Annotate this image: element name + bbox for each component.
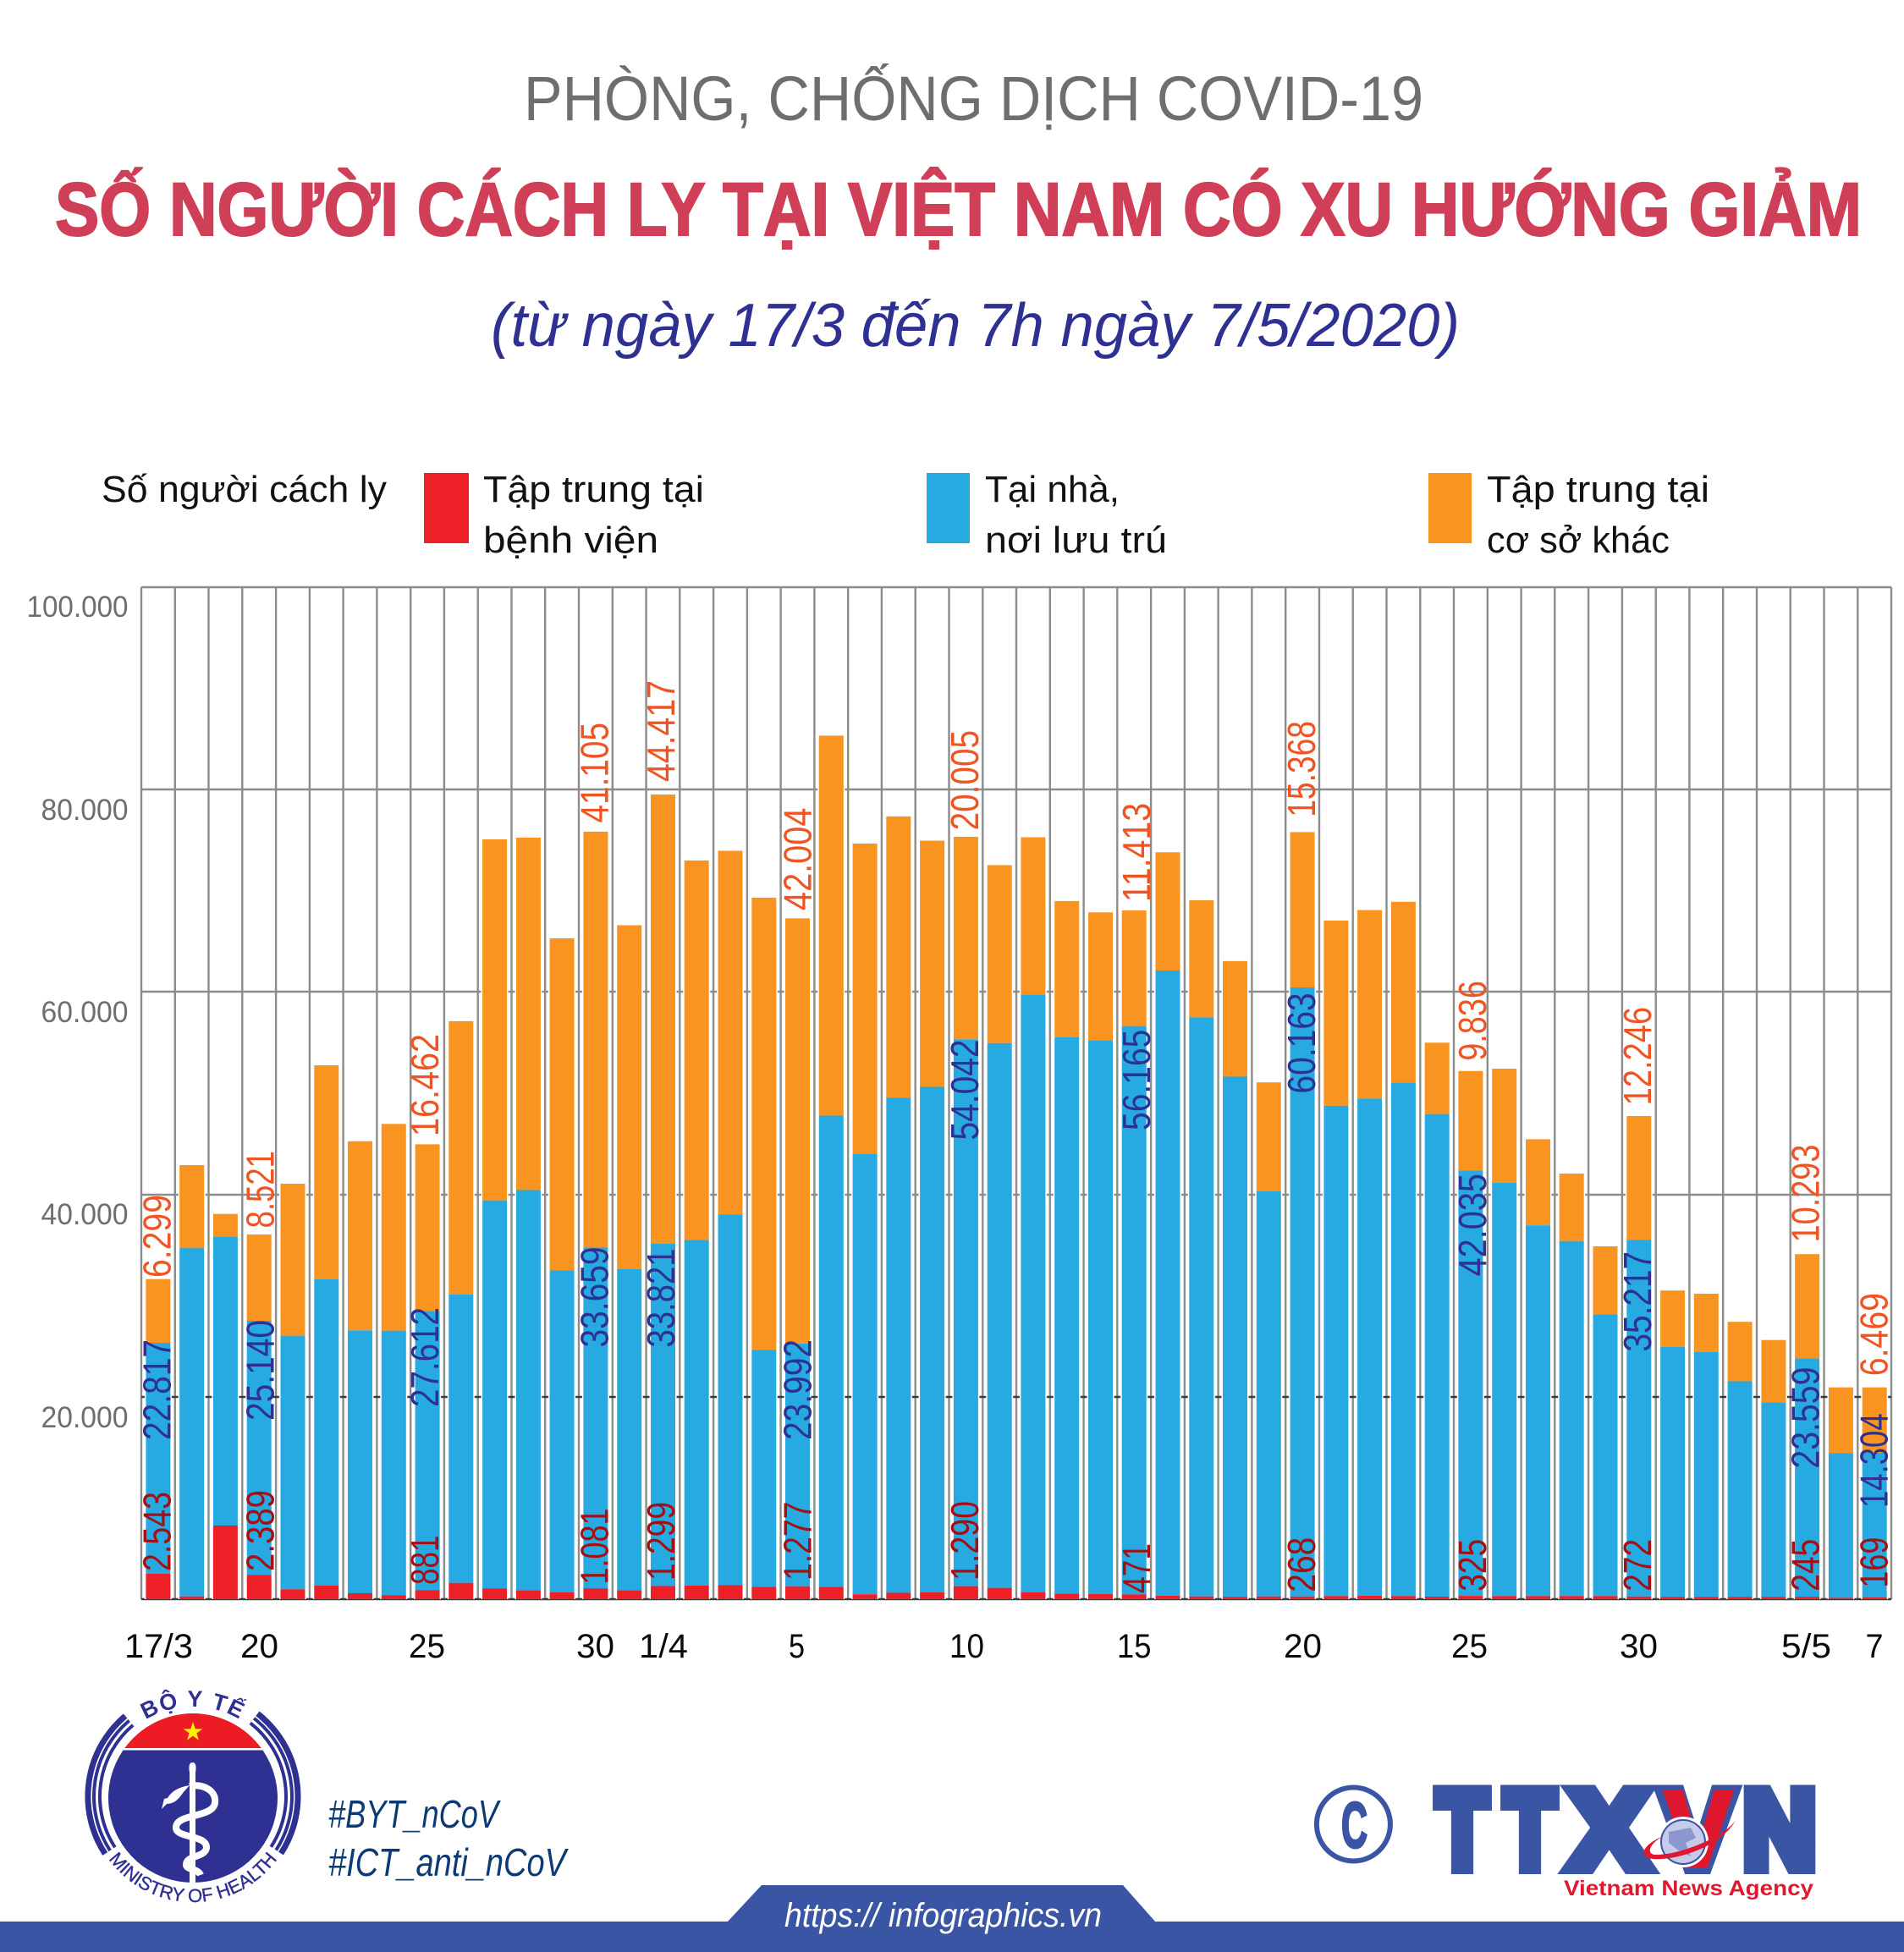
data labels 10/4: 54.042	[943, 1039, 987, 1141]
data labels 30/4	[1615, 1007, 1659, 1592]
data labels 7/5: 169	[1852, 1537, 1896, 1588]
data labels 30/4: 35.217	[1615, 1251, 1659, 1352]
bar 21/4	[1323, 920, 1350, 1599]
bar 23/3	[347, 1141, 374, 1599]
bar 16/4	[1154, 851, 1181, 1599]
bar 18/3	[179, 1164, 206, 1599]
bar 11/4	[986, 865, 1013, 1599]
data labels 30/3: 1.081	[572, 1508, 616, 1584]
hashtags: #BYT_nCoV	[328, 1792, 501, 1836]
bar 6/5	[1827, 1387, 1854, 1599]
x axis date labels: 30	[576, 1628, 614, 1665]
x axis date labels: 1/4	[639, 1628, 688, 1665]
bar 8/4	[885, 816, 912, 1599]
y axis labels: 20.000	[41, 1401, 129, 1434]
y axis labels: 80.000	[41, 794, 129, 827]
bar 28/3	[515, 837, 542, 1599]
x axis date labels: 17/3	[124, 1628, 193, 1665]
data labels 25/4: 9.836	[1450, 981, 1494, 1061]
y axis labels: 60.000	[41, 996, 129, 1029]
x axis date labels: 20	[240, 1628, 278, 1665]
data labels 5/4	[775, 808, 819, 1581]
data labels 30/4: 272	[1615, 1539, 1659, 1592]
x axis date labels: 10	[949, 1628, 984, 1665]
data labels 20/3: 25.140	[239, 1320, 283, 1421]
data labels 1/4: 44.417	[639, 680, 683, 782]
footer tab with website	[727, 1885, 1156, 1934]
legend item: other facilities: cơ sở khác	[1487, 520, 1670, 561]
bar 19/3	[212, 1213, 239, 1599]
bar 27/3	[482, 839, 509, 1599]
bar 10/4	[952, 836, 979, 1599]
x axis date labels: 5	[789, 1628, 805, 1665]
icon: copyright mark: C	[1341, 1790, 1367, 1861]
data labels 25/4	[1450, 981, 1494, 1592]
data labels 20/4: 268	[1279, 1537, 1323, 1592]
data labels 30/3: 41.105	[572, 723, 616, 822]
bar 3/4	[717, 850, 744, 1599]
legend item: hospital	[424, 469, 704, 561]
x axis date labels	[124, 1628, 1884, 1665]
bar 12/4	[1020, 836, 1047, 1599]
data labels 15/4: 56.165	[1114, 1030, 1158, 1130]
data labels 20/3	[239, 1151, 283, 1571]
footer tab with website: https:// infographics.vn	[784, 1897, 1102, 1934]
data labels 25/4: 325	[1450, 1539, 1494, 1592]
legend item: at home	[927, 469, 1167, 561]
legend item: at home: nơi lưu trú	[985, 520, 1167, 561]
icon: globe	[1643, 1817, 1736, 1867]
legend item: other facilities	[1428, 469, 1709, 561]
legend item: hospital: bệnh viện	[483, 520, 658, 561]
data labels 30/3	[572, 723, 616, 1584]
bar 18/4	[1222, 960, 1249, 1599]
bar 30/4	[1626, 1115, 1653, 1599]
bar 27/4	[1525, 1138, 1552, 1599]
subtitle: date range: (từ ngày 17/3 đến 7h ngày 7/5/2020)	[491, 292, 1460, 360]
data labels 7/5: 14.304	[1852, 1413, 1896, 1508]
x axis date labels: 25	[409, 1628, 445, 1665]
bar 20/3	[245, 1234, 272, 1599]
data labels 17/3: 22.817	[135, 1339, 179, 1440]
logo: Ministry of Health: BỘ Y TẾ	[140, 1689, 247, 1719]
logo: Ministry of Health: MINISTRY OF HEALTH	[108, 1851, 277, 1902]
data labels 5/5: 245	[1784, 1539, 1828, 1592]
bar 25/4	[1457, 1070, 1484, 1599]
logo: TTXVN Vietnam News Agency: V	[1665, 1771, 1731, 1889]
bar 29/3	[548, 938, 575, 1599]
bar 29/4	[1592, 1245, 1619, 1599]
icon: copyright mark	[1317, 1787, 1390, 1861]
bar 23/4	[1389, 901, 1417, 1599]
bar 5/5	[1794, 1253, 1821, 1599]
bar 2/4	[683, 860, 710, 1599]
data labels 1/4: 33.821	[639, 1249, 683, 1347]
data labels 1/4: 1.299	[639, 1502, 683, 1581]
data labels 5/4: 1.277	[775, 1502, 819, 1581]
data labels 5/5: 10.293	[1784, 1145, 1828, 1242]
bar 1/5	[1659, 1289, 1687, 1599]
data labels 17/3	[135, 1195, 179, 1571]
bar 6/4	[817, 734, 845, 1599]
logo: Ministry of Health	[85, 1689, 301, 1902]
data labels 1/4	[639, 680, 683, 1581]
bar 13/4	[1054, 900, 1081, 1599]
data labels 15/4: 471	[1114, 1543, 1158, 1593]
bar 3/5	[1726, 1321, 1753, 1599]
data labels 5/4: 23.992	[775, 1339, 819, 1440]
bar 2/5	[1692, 1293, 1720, 1599]
y axis labels	[27, 591, 129, 1434]
legend title: Số người cách ly	[102, 469, 387, 510]
bar 14/4	[1087, 911, 1114, 1599]
bar 24/3	[380, 1123, 407, 1599]
data labels 5/5: 23.559	[1784, 1367, 1828, 1469]
heading: campaign title: PHÒNG, CHỐNG DỊCH COVID-19	[524, 63, 1423, 134]
logo: TTXVN Vietnam News Agency: V	[1661, 1768, 1734, 1891]
bar 15/4	[1120, 910, 1147, 1599]
bar 7/4	[851, 843, 878, 1599]
data labels 30/3: 33.659	[572, 1247, 616, 1347]
x axis date labels: 25	[1451, 1628, 1488, 1665]
bar 20/4	[1289, 831, 1316, 1599]
bar 4/5	[1760, 1339, 1787, 1599]
x axis date labels: 30	[1620, 1628, 1658, 1665]
data labels 20/3: 2.389	[239, 1490, 283, 1571]
x axis date labels: 7	[1865, 1628, 1884, 1665]
logo: TTXVN Vietnam News Agency: N	[1743, 1768, 1816, 1891]
x axis date labels: 20	[1284, 1628, 1322, 1665]
logo: TTXVN Vietnam News Agency: T	[1505, 1768, 1555, 1891]
data labels 17/3: 6.299	[135, 1195, 179, 1278]
bar 30/3	[582, 831, 609, 1599]
logo: TTXVN Vietnam News Agency	[1437, 1768, 1816, 1900]
data labels 25/4: 42.035	[1450, 1174, 1494, 1276]
legend item: other facilities: Tập trung tại	[1487, 469, 1709, 510]
data labels 7/5: 6.469	[1852, 1293, 1896, 1376]
bar 26/4	[1491, 1068, 1518, 1599]
logo: TTXVN Vietnam News Agency: Vietnam News Agency	[1564, 1877, 1813, 1900]
bar 22/3	[313, 1064, 340, 1599]
data labels 20/4: 15.368	[1279, 721, 1323, 817]
data labels 25/3: 16.462	[403, 1034, 447, 1136]
legend item: at home: Tại nhà,	[985, 469, 1120, 510]
hashtags: #ICT_anti_nCoV	[328, 1840, 570, 1884]
bar 28/4	[1558, 1173, 1585, 1599]
bar 26/3	[448, 1020, 475, 1599]
bar 22/4	[1356, 910, 1384, 1599]
data labels 17/3: 2.543	[135, 1492, 179, 1571]
footer band	[0, 1922, 1904, 1952]
bar 4/4	[751, 897, 778, 1599]
y axis labels: 100.000	[27, 591, 129, 624]
data labels 30/4: 12.246	[1615, 1007, 1659, 1105]
bar 21/3	[279, 1183, 306, 1599]
data labels 20/3: 8.521	[239, 1151, 283, 1229]
data labels 10/4	[943, 730, 987, 1581]
x axis date labels: 5/5	[1781, 1628, 1831, 1665]
legend	[102, 469, 1709, 561]
data labels 15/4: 11.413	[1114, 803, 1158, 902]
logo: TTXVN Vietnam News Agency: T	[1437, 1768, 1488, 1891]
bar 31/3	[616, 924, 643, 1599]
bar 9/4	[919, 839, 946, 1599]
bar 17/3	[145, 1278, 172, 1599]
data labels 15/4	[1114, 803, 1158, 1593]
data labels 10/4: 20.005	[943, 730, 987, 830]
bar 25/3	[414, 1143, 441, 1599]
data labels 20/4	[1279, 721, 1323, 1592]
logo: TTXVN Vietnam News Agency: X	[1570, 1768, 1648, 1891]
stacked bar chart	[135, 587, 1896, 1599]
bar 7/5	[1861, 1387, 1888, 1599]
data labels 25/3: 27.612	[403, 1307, 447, 1407]
legend item: hospital: Tập trung tại	[483, 469, 704, 510]
bar 17/4	[1188, 899, 1215, 1599]
data labels 25/3	[403, 1034, 447, 1585]
bar 19/4	[1255, 1081, 1282, 1599]
data labels 5/4: 42.004	[775, 808, 819, 910]
data labels 25/3: 881	[403, 1536, 447, 1585]
bar 1/4	[650, 794, 677, 1599]
data labels 5/5	[1784, 1145, 1828, 1592]
data labels 7/5	[1852, 1293, 1896, 1588]
bar 5/4	[784, 917, 811, 1599]
data labels 10/4: 1.290	[943, 1501, 987, 1581]
data labels 20/4: 60.163	[1279, 992, 1323, 1094]
y axis labels: 40.000	[41, 1198, 129, 1231]
bar 24/4	[1423, 1042, 1450, 1599]
hashtags	[328, 1792, 570, 1884]
x axis date labels: 15	[1117, 1628, 1151, 1665]
